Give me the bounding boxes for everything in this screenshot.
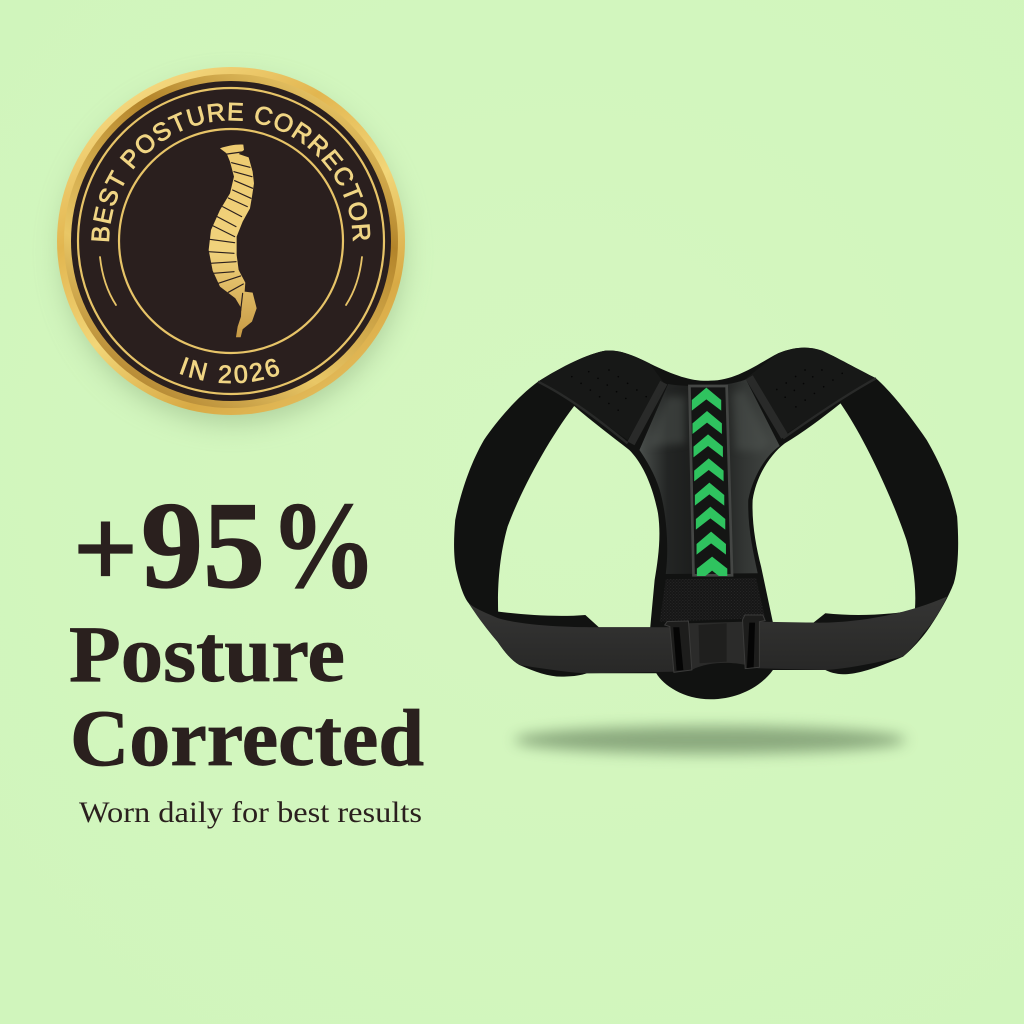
plus and digits: 95: [141, 477, 265, 614]
right tick arc: [346, 257, 362, 305]
left shoulder seam: [538, 382, 628, 443]
chevron strip: [689, 386, 732, 575]
right shoulder pad: [746, 348, 876, 433]
panel highlight left: [648, 397, 685, 447]
inner thin ring: [119, 129, 343, 353]
webbing left of panel: [631, 383, 664, 443]
gold outer rim: [57, 67, 405, 415]
icon: spine: [209, 145, 257, 337]
left belt: [469, 603, 677, 673]
posture corrector brace: [454, 348, 958, 699]
plus and digits: +: [73, 485, 138, 612]
product shadow: [514, 726, 906, 754]
outer thin ring: [78, 88, 384, 394]
headline: +95%: [73, 477, 377, 615]
badge year text: IN 2026: [180, 357, 280, 384]
gold inner bevel: [64, 74, 398, 408]
left shoulder pad: [538, 350, 663, 440]
brace silhouette: [454, 348, 958, 699]
headline: Posture: Posture: [69, 611, 345, 699]
velcro tab: [699, 623, 727, 663]
badge: best posture corrector: [52, 67, 414, 433]
left buckle frame: [665, 621, 692, 672]
right shoulder seam: [783, 378, 876, 438]
subtitle: Worn daily for best results: [79, 796, 422, 829]
webbing right of panel: [749, 377, 785, 437]
badge shadow: [63, 82, 403, 422]
left buckle slot: [673, 627, 683, 671]
left tick arc: [100, 257, 116, 305]
mesh panel: [660, 578, 765, 622]
headline: Corrected: Corrected: [70, 695, 424, 783]
left buckle: [665, 621, 692, 672]
center buckle strap: [688, 622, 746, 670]
right belt: [754, 597, 947, 670]
green chevrons: [692, 388, 727, 576]
panel highlight right: [732, 390, 770, 452]
badge heading text: BEST POSTURE CORRECTOR: [91, 102, 370, 242]
dark disc: [71, 81, 391, 401]
right buckle slot: [747, 623, 755, 668]
shoulder perforations: [572, 370, 842, 413]
right buckle: [743, 615, 765, 669]
percent sign: %: [270, 478, 377, 615]
right buckle frame: [743, 615, 765, 669]
glossy back panel: [639, 379, 780, 574]
